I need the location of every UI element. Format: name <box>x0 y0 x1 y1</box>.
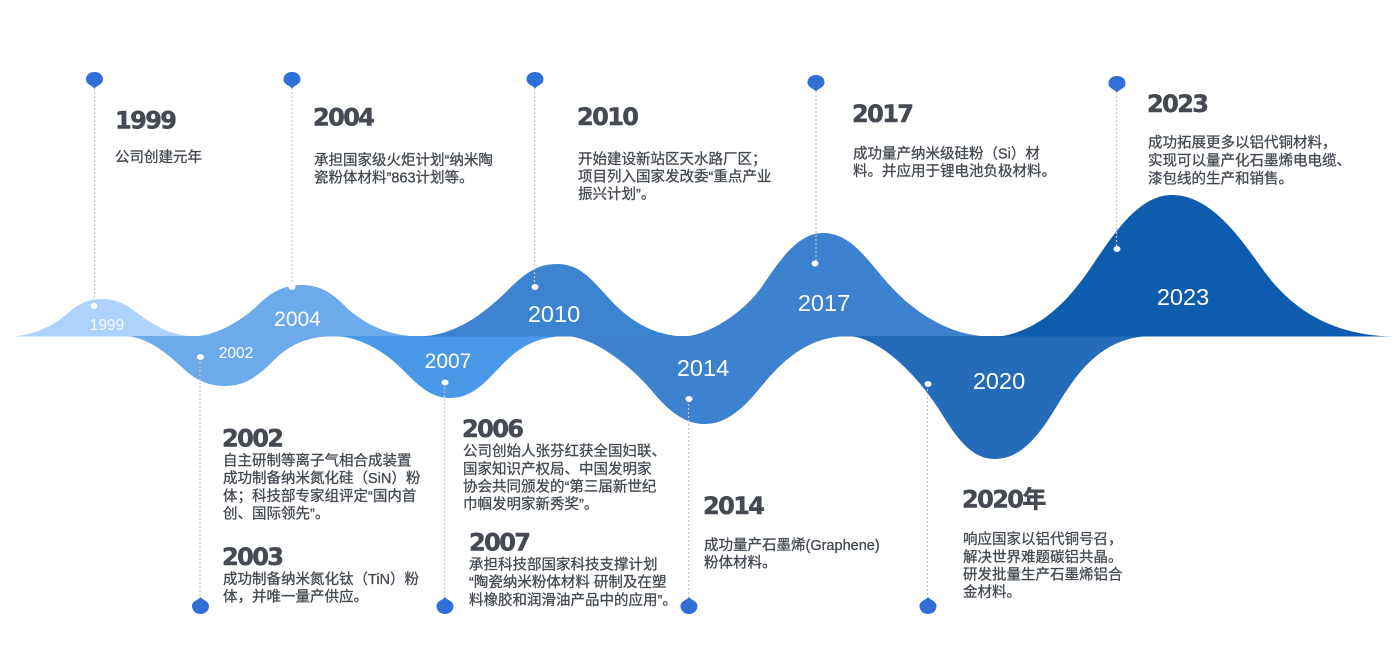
wave: 2020 <box>850 336 1153 459</box>
year labels on waves: 2010 <box>528 301 580 327</box>
wave: 2014 <box>567 336 850 424</box>
text block: 2017: 料。并应用于锂电池负极材料。 <box>853 162 1056 180</box>
text block: 1999 <box>115 106 202 166</box>
wave: 2002 <box>127 336 337 386</box>
text block: 2002: 成功制备纳米氮化硅（SiN）粉 <box>223 470 421 487</box>
bottom pin icons <box>192 597 936 614</box>
text block: 2017 <box>852 100 1056 180</box>
text block: 2004: 2004 <box>313 104 374 132</box>
year labels on waves <box>90 284 1209 394</box>
text block: 2006 <box>462 415 666 513</box>
year labels on waves: 2002 <box>219 345 253 362</box>
wave: 2007 <box>337 336 567 398</box>
year labels on waves: 2004 <box>274 308 321 331</box>
text block: 2023: 成功拓展更多以铝代铜材料， <box>1148 134 1336 152</box>
text block: 2020: 金材料。 <box>963 584 1021 601</box>
text block: 2020: 解决世界难题碳铝共晶。 <box>963 549 1122 566</box>
text block: 2007 <box>469 528 677 609</box>
wave chart: yearly humps <box>13 195 1396 459</box>
text block: 2002: 创、国际领先”。 <box>223 506 329 522</box>
text block: 2020: 2020年 <box>962 486 1046 514</box>
text block: 2017: 2017 <box>852 100 912 128</box>
text block: 2023 <box>1147 90 1351 188</box>
text block: 2010: 开始建设新站区天水路厂区； <box>578 151 766 168</box>
wave: 2017 <box>683 233 990 336</box>
text block: 1999: 公司创建元年 <box>115 149 202 166</box>
text block: 2004 <box>313 104 493 186</box>
text block: 2014 <box>703 492 880 572</box>
text block: 2020 <box>962 486 1123 601</box>
year labels on waves: 2007 <box>425 350 471 373</box>
text block: 2003 <box>222 543 420 606</box>
wave: 2004 <box>193 285 420 336</box>
wave: 2010 <box>418 264 686 336</box>
year labels on waves: 2014 <box>677 355 729 381</box>
white marker dots <box>90 246 1120 402</box>
text block: 2010: 项目列入国家发改委“重点产业 <box>578 168 771 186</box>
text block: 2007: “陶瓷纳米粉体材料 研制及在塑 <box>469 574 666 591</box>
text block: 2004: 瓷粉体材料”863计划等。 <box>314 168 474 186</box>
text block: 2023: 2023 <box>1147 90 1207 118</box>
text block: 2010 <box>577 103 771 203</box>
text block: 2014: 2014 <box>703 492 764 520</box>
text block: 2017: 成功量产纳米级硅粉（Si）材 <box>853 146 1040 162</box>
text block: 2003: 2003 <box>222 543 282 571</box>
text block: 2006: 协会共同颁发的“第三届新世纪 <box>463 478 656 496</box>
text block: 1999: 1999 <box>115 106 176 134</box>
text block: 2007: 料橡胶和润滑油产品中的应用”。 <box>469 591 677 609</box>
text block: 2004: 承担国家级火炬计划“纳米陶 <box>314 152 493 169</box>
text block: 2020: 研发批量生产石墨烯铝合 <box>963 566 1123 584</box>
text block: 2003: 体，并唯一量产供应。 <box>223 588 368 606</box>
text block: 2014: 成功量产石墨烯(Graphene) <box>704 537 880 554</box>
text block: 2006: 公司创始人张芬红获全国妇联、 <box>463 442 666 460</box>
text block: 2014: 粉体材料。 <box>704 554 776 572</box>
text block: 2007: 承担科技部国家科技支撑计划 <box>469 556 658 574</box>
year labels on waves: 2023 <box>1157 284 1209 310</box>
wave: 2023 <box>1000 195 1396 336</box>
text block: 2006: 巾帼发明家新秀奖”。 <box>463 496 598 513</box>
text block: 2003: 成功制备纳米氮化钛（TiN）粉 <box>223 571 420 588</box>
top pin icons <box>86 72 1126 92</box>
text block: 2010: 振兴计划”。 <box>578 186 655 203</box>
text block: 2023: 漆包线的生产和销售。 <box>1148 170 1293 188</box>
year labels on waves: 1999 <box>90 317 124 334</box>
year labels on waves: 2020 <box>973 368 1025 394</box>
text block: 2002: 自主研制等离子气相合成装置 <box>223 452 412 470</box>
text block: 2006: 2006 <box>462 415 523 443</box>
wave: 1999 <box>13 299 195 336</box>
text block: 2020: 响应国家以铝代铜号召， <box>963 530 1122 548</box>
text block: 2006: 国家知识产权局、中国发明家 <box>463 461 652 478</box>
year labels on waves: 2017 <box>798 290 850 316</box>
text block: 2010: 2010 <box>577 103 638 131</box>
text block: 2002: 体；科技部专家组评定“国内首 <box>223 488 416 505</box>
text block: 2007: 2007 <box>469 528 529 556</box>
text block: 2002 <box>222 424 421 522</box>
text block: 2002: 2002 <box>222 424 282 452</box>
dotted connector lines <box>94 88 1116 597</box>
text block: 2023: 实现可以量产化石墨烯电电缆、 <box>1148 152 1351 170</box>
